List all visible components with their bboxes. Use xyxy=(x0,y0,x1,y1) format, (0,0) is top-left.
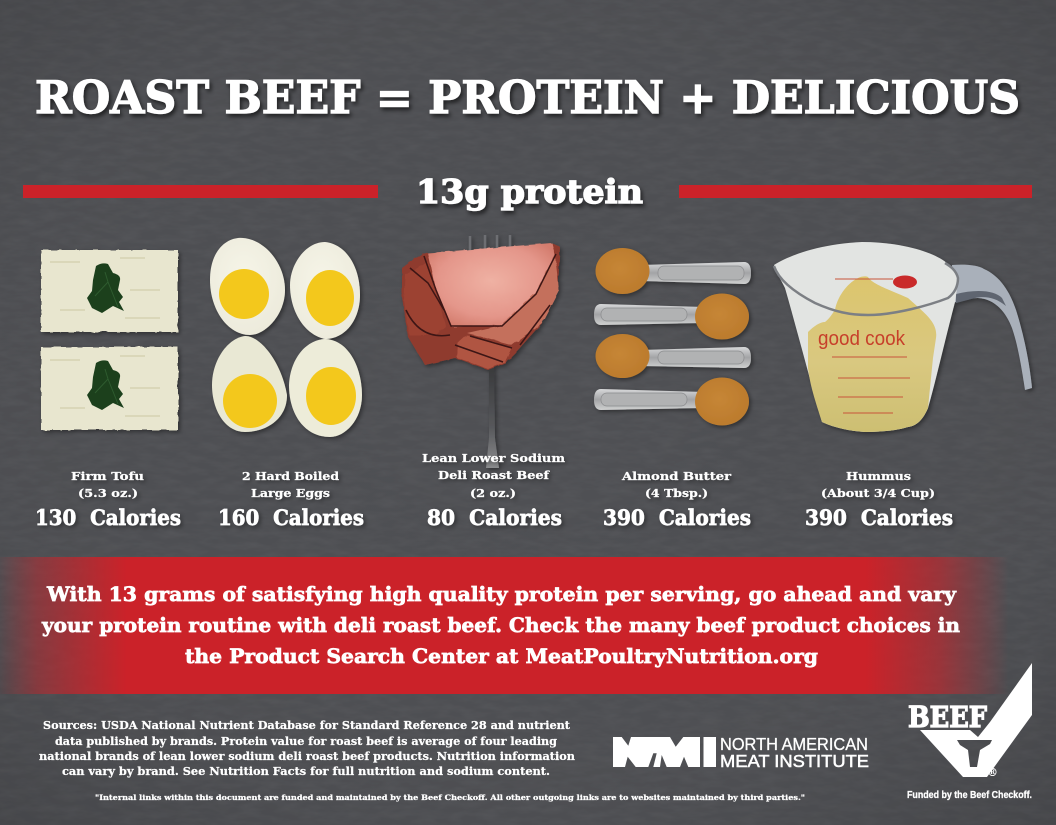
label: eggs: 2 Hard Boiled xyxy=(242,469,339,483)
icon: hard boiled eggs xyxy=(210,238,362,437)
spoon 1 xyxy=(596,248,751,294)
logo: NAMI xyxy=(613,734,869,771)
red message band xyxy=(0,557,1056,694)
icon: almond butter spoons xyxy=(594,248,751,426)
logo: Beef checkoff: BEEF xyxy=(908,700,987,734)
subheading: 13g protein: 13g protein xyxy=(416,172,643,211)
cup brand text: good cook xyxy=(818,328,906,350)
label: hummus: (About 3/4 Cup) xyxy=(821,486,935,500)
label: firm tofu xyxy=(35,469,181,530)
band text xyxy=(41,582,960,668)
label: eggs: 160 Calories xyxy=(218,505,364,530)
label: hummus: Hummus xyxy=(846,469,911,483)
sources text: Sources: USDA National Nutrient Database for Standard Reference 28 and nutrient xyxy=(43,719,571,732)
title: ROAST BEEF = PROTEIN + DELICIOUS xyxy=(35,71,1020,124)
sources text: national brands of lean lower sodium deli roast beef products. Nutrition information xyxy=(39,750,575,763)
label: roast beef: 80 Calories xyxy=(427,505,562,530)
sources text: can vary by brand. See Nutrition Facts for full nutrition and sodium content. xyxy=(62,765,550,778)
label: almond butter xyxy=(603,469,751,530)
sources text xyxy=(39,719,575,778)
spoon 2 xyxy=(594,294,749,340)
band text: the Product Search Center at MeatPoultryNutrition.org xyxy=(185,644,818,668)
label: almond butter: (4 Tbsp.) xyxy=(645,486,708,500)
logo: Beef checkoff: ® xyxy=(987,766,998,779)
red rule right xyxy=(679,185,1032,198)
spoon 3 xyxy=(596,334,751,378)
footnote: "Internal links within this document are funded and maintained by the Beef Checkoff. All other outgoing links are to websites maintained by third parties." xyxy=(95,793,805,802)
funded by line: Funded by the Beef Checkoff. xyxy=(907,789,1032,801)
band text: your protein routine with deli roast beef. Check the many beef product choices in xyxy=(41,613,960,637)
label: almond butter: 390 Calories xyxy=(603,505,751,530)
label: firm tofu: Firm Tofu xyxy=(71,469,144,483)
logo: NAMI: MEAT INSTITUTE xyxy=(720,751,869,771)
label: eggs xyxy=(218,469,364,530)
red rule left xyxy=(23,185,378,198)
icon: tofu slices xyxy=(41,250,178,430)
label: firm tofu: (5.3 oz.) xyxy=(78,486,138,500)
logo: Beef checkoff xyxy=(907,663,1032,801)
label: roast beef xyxy=(422,451,565,530)
label: eggs: Large Eggs xyxy=(251,486,330,500)
label: roast beef: (2 oz.) xyxy=(470,486,516,500)
label: roast beef: Deli Roast Beef xyxy=(438,468,550,482)
icon: roast beef on fork xyxy=(402,235,560,468)
spoon 4 xyxy=(594,378,749,426)
band text: With 13 grams of satisfying high quality protein per serving, go ahead and vary xyxy=(46,582,957,606)
label: roast beef: Lean Lower Sodium xyxy=(422,451,565,465)
logo: NAMI: NORTH AMERICAN xyxy=(720,734,868,754)
icon: hummus measuring cup xyxy=(774,242,1032,432)
label: firm tofu: 130 Calories xyxy=(35,505,181,530)
label: hummus xyxy=(805,469,953,530)
sources text: data published by brands. Protein value for roast beef is average of four leading xyxy=(55,735,557,748)
label: almond butter: Almond Butter xyxy=(621,469,732,483)
label: hummus: 390 Calories xyxy=(805,505,953,530)
